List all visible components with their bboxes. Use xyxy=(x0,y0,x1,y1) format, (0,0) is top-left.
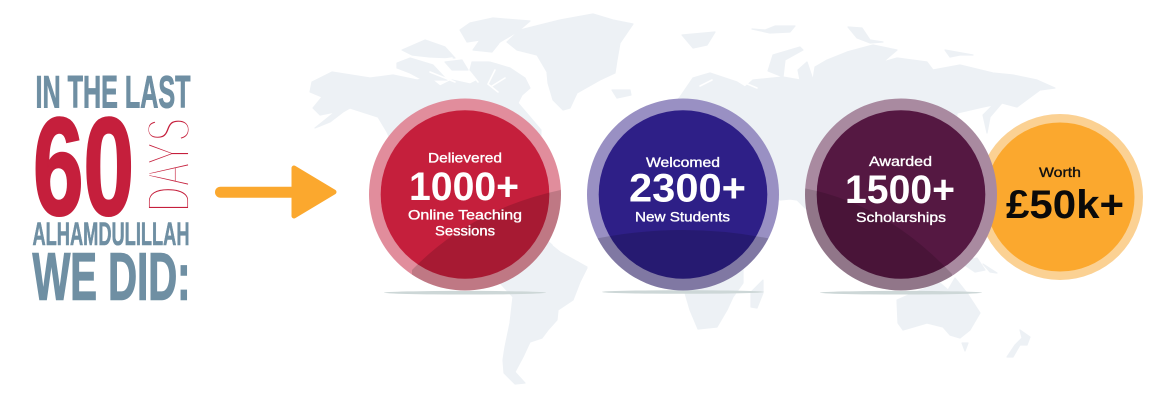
heading: 60: 60 xyxy=(33,90,134,244)
label: scholarships: Scholarships xyxy=(856,209,946,225)
world map background xyxy=(310,14,1055,384)
heading: we did: WE DID: xyxy=(32,240,190,314)
label: online teaching: Online Teaching xyxy=(408,206,522,222)
heading: in the last: IN THE LAST xyxy=(36,66,190,118)
label: awarded: Awarded xyxy=(869,153,932,169)
caribbean coast xyxy=(545,240,587,267)
shadow under circle 2 xyxy=(602,290,764,294)
madagascar xyxy=(751,280,763,308)
number: 50k+: £50k+ xyxy=(1006,183,1124,227)
circle: worth 50k xyxy=(977,114,1143,280)
new zealand xyxy=(1007,330,1030,357)
north america xyxy=(310,18,552,260)
heading: days vertical: DAYS xyxy=(134,118,204,212)
label: delievered: Delievered xyxy=(428,150,502,166)
circle: new students xyxy=(585,98,781,295)
number: 1000+: 1000+ xyxy=(409,165,519,209)
label: worth: Worth xyxy=(1039,164,1081,180)
iceland xyxy=(612,90,631,98)
label: sessions: Sessions xyxy=(435,223,495,239)
label: new students: New Students xyxy=(635,209,730,225)
greenland xyxy=(507,14,633,110)
arctic and pacific islands xyxy=(682,26,997,273)
arrow xyxy=(215,168,334,216)
number: 2300+: 2300+ xyxy=(629,167,746,211)
label: welcomed: Welcomed xyxy=(646,154,720,170)
tasmania xyxy=(962,343,968,351)
south america xyxy=(500,245,587,384)
eurasia xyxy=(660,45,1055,260)
heading: alhamdulillah: ALHAMDULILLAH xyxy=(32,216,190,252)
circle: online teaching sessions xyxy=(369,98,570,300)
number: 1500+: 1500+ xyxy=(845,168,955,212)
africa xyxy=(680,260,743,329)
shadow under circle 3 xyxy=(820,291,982,295)
australia xyxy=(897,278,980,338)
circle: scholarships xyxy=(800,98,997,295)
shadow under circle 1 xyxy=(384,291,546,295)
